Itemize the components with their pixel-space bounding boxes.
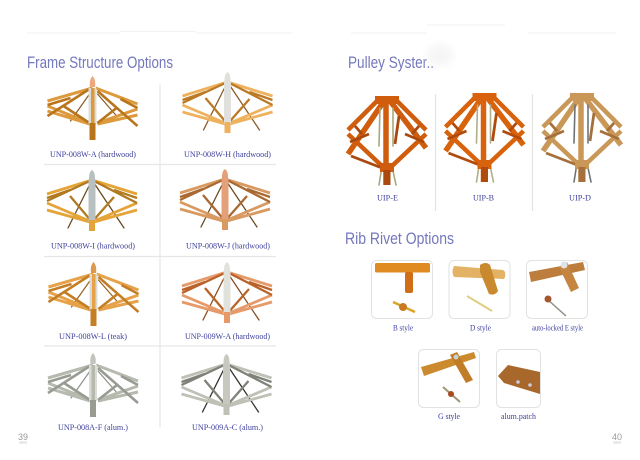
rivet alum.patch: alum.patch [501,412,536,421]
page number 39: UNION [19,442,27,444]
heading: Frame Structure Options: Frame Structure Options [27,53,173,72]
pulley UIP-D [543,93,621,202]
frame UNP-008W-L: UNP-008W-L (teak) [59,332,127,341]
frame UNP-008W-J: UNP-008W-J (hardwood) [186,242,270,250]
pulley UIP-B: UIP-B [473,194,494,202]
rivet G style: G style [438,412,460,421]
decorative top rules [27,25,616,33]
page number 40: UNION [613,442,621,444]
frame UNP-008W-I [47,170,137,250]
frame UNP-008W-A [48,76,138,159]
rivet auto-locked E style: auto-locked E style [532,324,583,332]
frame UNP-008W-H [182,72,272,159]
heading: Pulley System (partly faded): Pulley Syster.. [348,53,434,72]
rivet D style [449,260,510,332]
dividers between pulleys [436,94,532,211]
frame UNP-008W-H: UNP-008W-H (hardwood) [184,150,271,159]
rivet B style: B style [393,324,413,332]
pulley UIP-E: UIP-E [377,194,398,202]
pulley UIP-E [348,96,426,202]
rivet G style [418,350,480,421]
rivet B style [372,260,432,332]
frame UNP-009W-A [182,262,272,341]
frame UNP-008A-F: UNP-008A-F (alum.) [58,423,128,432]
frame UNP-008W-I: UNP-008W-I (hardwood) [51,242,135,250]
frame UNP-009A-C [182,354,272,432]
heading: Rib Rivet Options: Rib Rivet Options [345,229,454,248]
frame UNP-008W-J [180,169,270,250]
faded blur patch [426,44,454,66]
frame UNP-009W-A: UNP-009W-A (hardwood) [185,332,270,341]
frame UNP-008A-F [48,353,138,432]
rivet auto-locked E style [526,260,588,332]
rivet alum.patch [496,350,540,421]
pulley UIP-B [446,93,524,202]
frame UNP-009A-C: UNP-009A-C (alum.) [192,423,263,432]
frame UNP-008W-A: UNP-008W-A (hardwood) [50,150,136,159]
pulley UIP-D: UIP-D [569,194,591,202]
page number 39: 39 [18,432,28,442]
rivet D style: D style [470,324,491,332]
grid lines [44,84,276,427]
frame UNP-008W-L [48,262,138,341]
page number 40: 40 [612,432,622,442]
